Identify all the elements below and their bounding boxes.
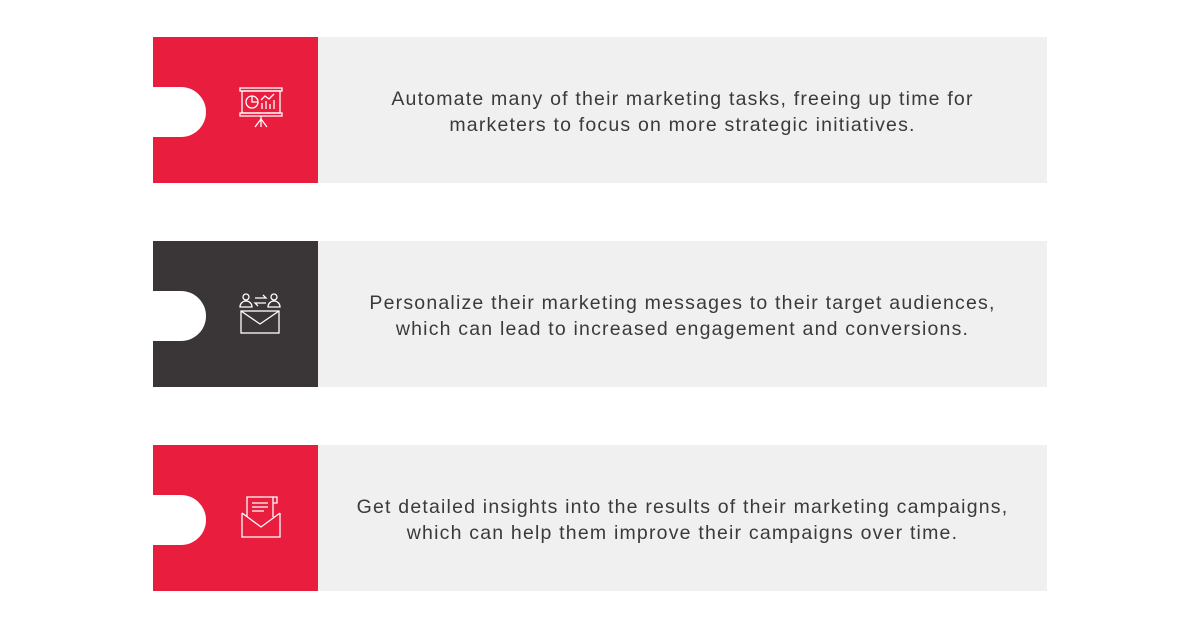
icon: people and envelope	[239, 293, 281, 334]
row 3	[153, 445, 1047, 591]
dark block	[153, 241, 318, 387]
text 1: Automate many of their marketing tasks, freeing up time for	[391, 88, 974, 110]
text 2: Personalize their marketing messages to their target audiences,	[369, 292, 996, 314]
text 1	[318, 37, 1047, 183]
text 2	[318, 241, 1047, 387]
text 3	[318, 445, 1047, 591]
row 1	[153, 37, 1047, 183]
text 3: Get detailed insights into the results of their marketing campaigns,	[357, 496, 1008, 518]
icon: letter in envelope	[241, 496, 281, 538]
text 3: which can help them improve their campaigns over time.	[407, 522, 958, 544]
row 2	[153, 241, 1047, 387]
text 1: marketers to focus on more strategic initiatives.	[449, 114, 916, 136]
icon: presentation board	[239, 87, 283, 128]
red block	[153, 445, 318, 591]
text 2: which can lead to increased engagement and conversions.	[396, 318, 969, 340]
red block	[153, 37, 318, 183]
